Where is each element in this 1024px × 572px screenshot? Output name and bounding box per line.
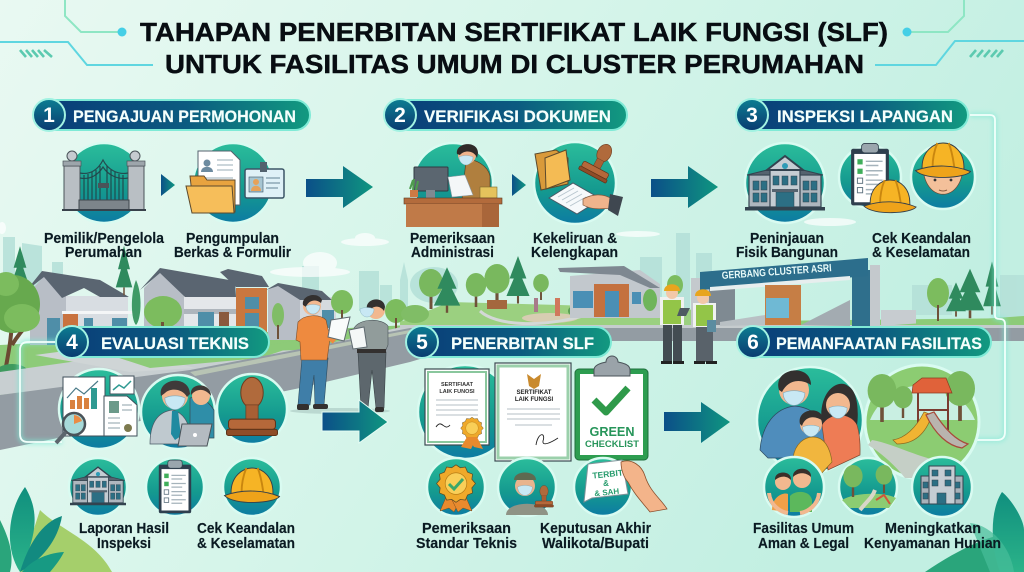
resident in orange [296,295,350,410]
inspector with folder [693,289,717,364]
banner 6: 6 [747,331,759,354]
step 6: pemanfaatan fasilitas [737,326,1001,552]
label: Pemeriksaan [410,231,495,247]
small arrow [161,174,175,196]
label: Kelengkapan [531,245,618,261]
icon: stamp [217,374,287,444]
bench [487,300,507,309]
label: Walikota/Bupati [542,536,649,552]
arrow 4 to 5 [322,400,388,443]
houses [26,268,336,345]
title circuit decoration right [875,0,1024,65]
certificate 1: SERTIFIAAT [441,382,474,388]
banner 4: EVALUASI TEKNIS [101,334,249,353]
label [410,231,495,261]
title circuit decoration left [0,0,153,65]
community building [558,266,660,318]
label: & Keselamatan [197,536,295,552]
banner 2 [384,99,627,131]
corner leaves left [0,487,112,572]
banner 5: 5 [416,331,428,354]
icon: folder and documents [186,143,284,223]
banner 1 [33,99,310,131]
neighbourhood lawn [0,318,1024,395]
banner 5 [406,326,611,358]
banner 4: 4 [66,331,78,354]
label [540,521,651,552]
title: TAHAPAN PENERBITAN SERTIFIKAT LAIK FUNGSI (SLF) [140,17,888,47]
green checklist clipboard: CHECKLIST [585,439,639,450]
label: Meningkatkan [885,521,981,537]
icon: terbit dan sah hand: & [603,479,609,488]
banner 6: PEMANFAATAN FASILITAS [776,334,982,353]
gate sign: GERBANG CLUSTER ASRI [721,262,832,282]
corner leaves right [925,492,1024,572]
banner 3 [736,99,968,131]
label: Standar Teknis [416,536,517,552]
banner 4 [56,326,269,358]
banner 3: 3 [746,104,758,127]
certificate backdrop circle [418,365,512,459]
label: Cek Keandalan [197,521,295,537]
label: Pemeriksaan [422,521,511,537]
label: Kekeliruan & [533,231,617,247]
banner 3: INSPEKSI LAPANGAN [777,107,953,126]
label: Laporan Hasil [79,521,169,537]
label: Fasilitas Umum [753,521,854,537]
step 3: inspeksi lapangan [736,99,975,261]
banner 1: 1 [43,104,55,127]
label: Kenyamanan Hunian [864,536,1001,552]
arrow 1 to 2 [306,166,373,208]
connectors [20,115,1005,442]
label [44,231,165,261]
certificate 1 [425,369,489,449]
label [79,521,169,552]
label [753,521,854,552]
label [864,521,1001,552]
banner 5: PENERBITAN SLF [451,334,594,353]
road [0,325,1024,450]
banner 1: PENGAJUAN PERMOHONAN [73,107,296,126]
arrow 5 to 6 [664,402,730,443]
banner 6 [737,326,991,358]
label [736,231,838,261]
certificate 2 [495,363,571,461]
step 1: pengajuan permohonan [33,99,310,261]
label: Peninjauan [750,231,824,247]
icon: officer at desk [404,143,502,227]
icon: playground [865,365,979,479]
label: Fisik Bangunan [736,245,838,261]
title [140,17,888,79]
step 4: evaluasi teknis [56,326,295,552]
park [400,256,700,326]
people handing over documents [290,295,390,414]
clouds [0,218,856,277]
green checklist clipboard [575,356,648,460]
left trees [0,246,407,380]
icon: family [757,367,863,475]
gate: gerbang cluster [691,258,880,327]
icon: official with stamp [498,458,556,516]
label: Perumahan [65,245,142,261]
inspectors [660,284,717,364]
icon: engineers with laptop [141,375,215,449]
step 5: penerbitan slf [406,326,667,552]
small arrow [512,174,526,196]
label: Berkas & Formulir [174,245,291,261]
label [531,231,618,261]
green checklist clipboard: GREEN [590,425,634,439]
certificate 2: LAIK FUNGSI [515,397,553,403]
label: Cek Keandalan [872,231,971,247]
house 2 [140,268,269,345]
officer in grey [349,299,388,412]
label: Pengumpulan [186,231,279,247]
label: Keputusan Akhir [540,521,651,537]
certificate 1: LAIK FUNOSI [439,389,475,395]
icon: hard hat small [223,458,281,516]
inspector with tablet [660,284,690,364]
icon: terbit dan sah hand: TERBIT [592,467,624,481]
banner 2: 2 [394,104,406,127]
certificate 2: SERTIFIKAT [517,390,552,396]
label: & Keselamatan [872,245,970,261]
icon: reports and magnifier [56,369,139,449]
house 1 [26,271,133,345]
label: Pemilik/Pengelola [44,231,165,247]
icon: terbit dan sah hand: & SAH [594,487,620,498]
label [872,231,971,261]
label: Administrasi [411,245,494,261]
icon: children and hands [764,457,824,517]
skyline [3,233,1024,320]
banner 2: VERIFIKASI DOKUMEN [424,107,611,126]
icon: building small [69,458,127,516]
step 2: verifikasi dokumen [384,99,627,261]
icon: residence building [912,457,972,517]
icon: worker face with hard hat [911,143,975,209]
trees and fence right [667,261,1024,330]
icon: clipboard and hard hat [839,143,916,213]
icon: terbit dan sah hand [574,458,667,516]
arrow 2 to 3 [651,166,718,208]
icon: building [745,143,825,223]
icon: clipboard small [146,458,204,516]
icon: folders, stamp and document [534,138,623,224]
title: UNTUK FASILITAS UMUM DI CLUSTER PERUMAHAN [165,49,864,79]
icon: gate [62,143,146,223]
icon: medal [427,458,485,516]
icon: park [839,458,897,516]
label: Inspeksi [97,536,151,552]
label [174,231,291,261]
house 3 [266,283,336,340]
label: Aman & Legal [758,536,849,552]
label [416,521,517,552]
label [197,521,295,552]
